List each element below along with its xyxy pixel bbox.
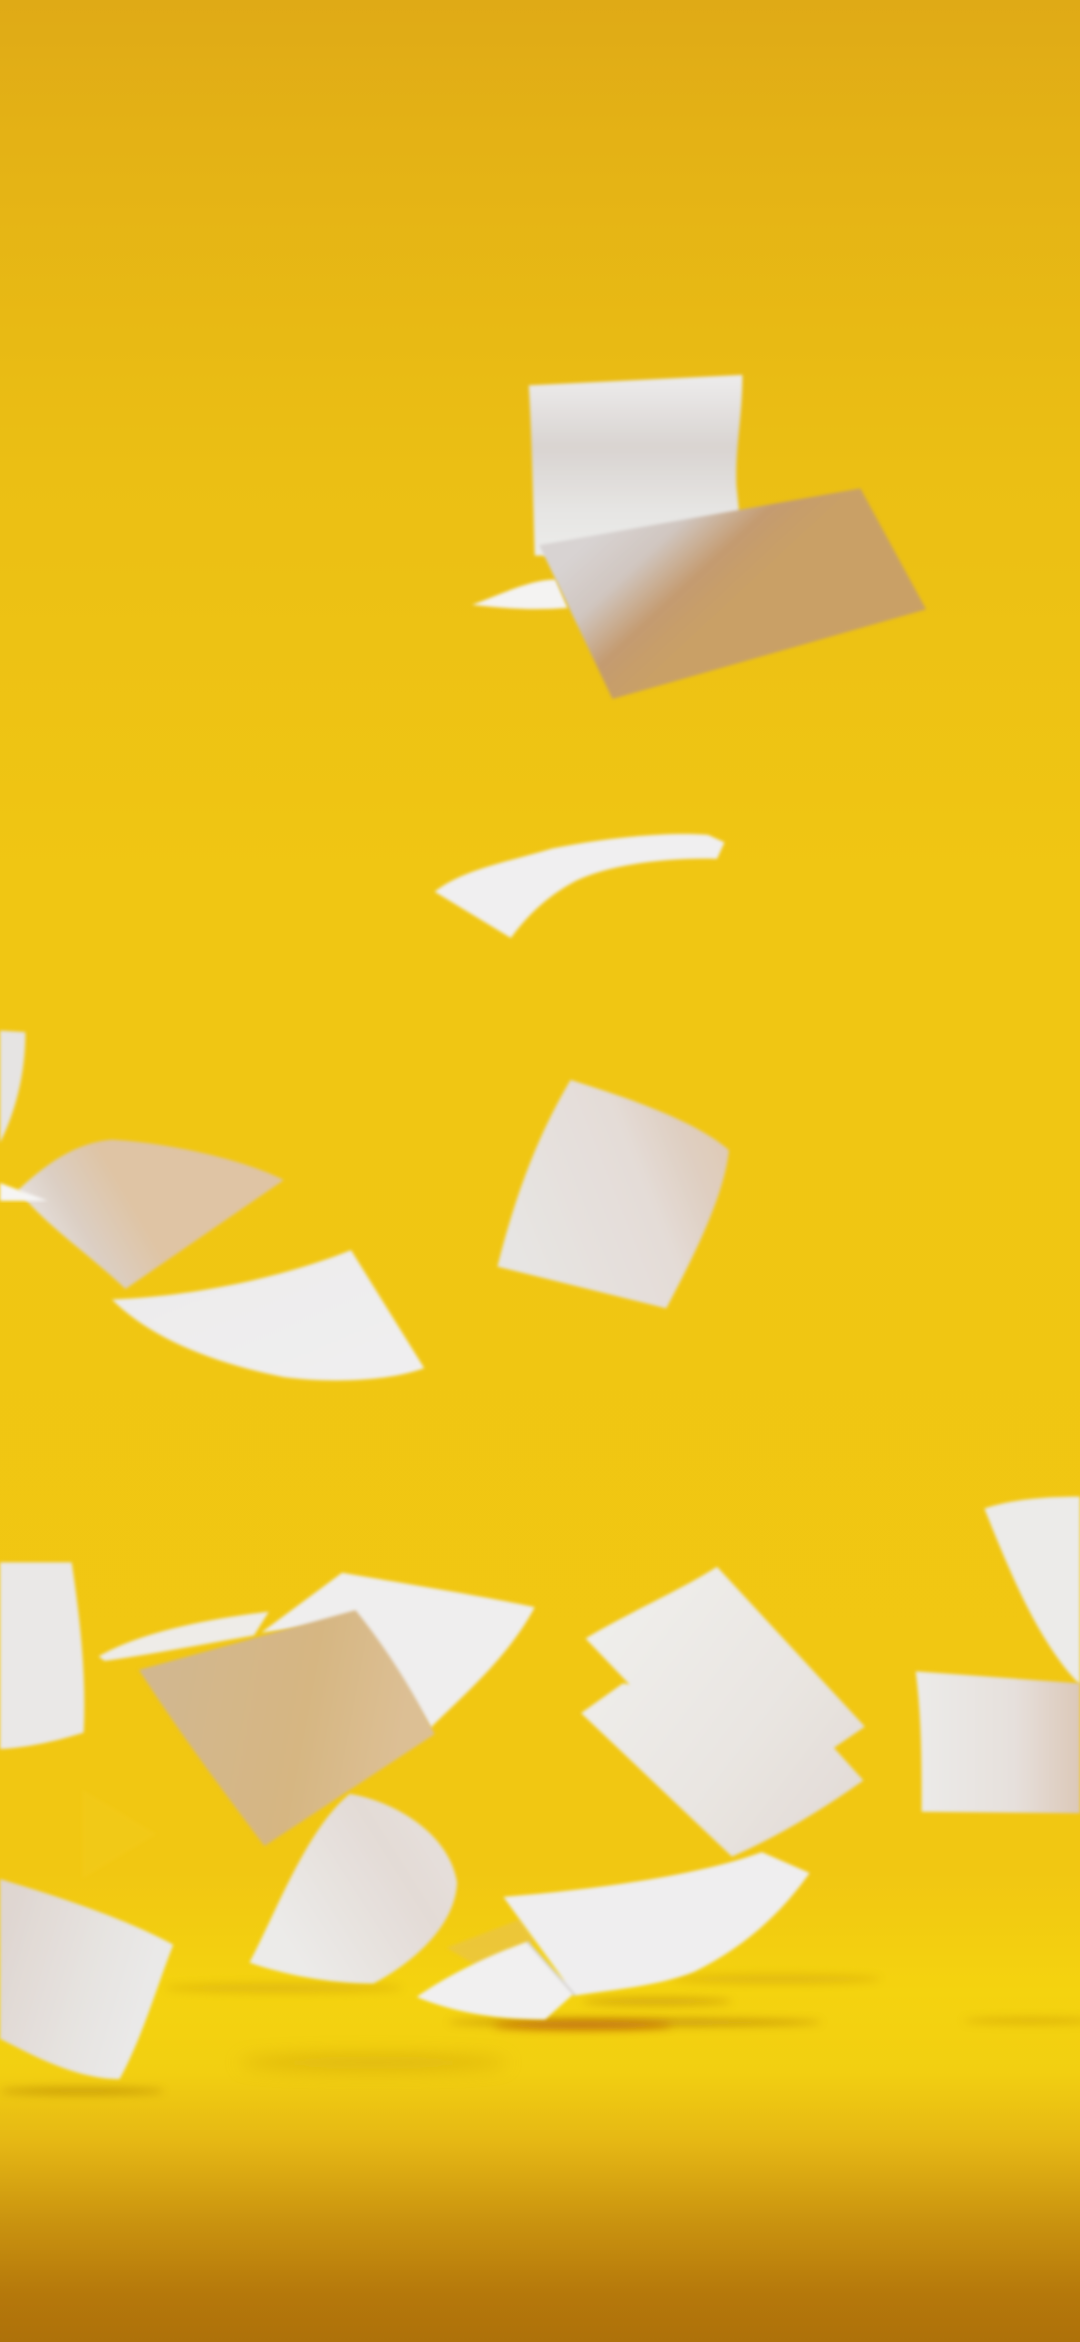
faint ghost triangle bbox=[82, 1789, 157, 1879]
paper: white curved sheet bbox=[112, 1250, 424, 1380]
paper: left tan sheet bbox=[18, 1140, 284, 1289]
paper: bottom folded sheet bbox=[417, 1852, 810, 2019]
floor shadows bbox=[0, 1975, 1080, 2094]
paper: upright folded sheet bbox=[529, 375, 742, 556]
paper: bottom left sheet bbox=[0, 1879, 173, 2079]
paper: stacked pair of sheets bbox=[581, 1567, 865, 1857]
paper: curled sheet edge-on bbox=[435, 834, 724, 938]
paper: sliver behind tan sheet bbox=[99, 1612, 269, 1661]
paper: left edge top sheet bbox=[0, 1031, 25, 1143]
paper: small sliver bbox=[472, 580, 568, 609]
paper: faint tan sheet behind bottom fold bbox=[447, 1919, 535, 1969]
paper: tan lower sheet bbox=[139, 1610, 435, 1846]
paper: right edge upper sheet bbox=[984, 1497, 1080, 1685]
paper: right edge lower sheet bbox=[916, 1671, 1080, 1813]
paper: rounded lower sheet bbox=[249, 1794, 457, 1984]
paper: white sheet behind tan sheet bbox=[261, 1573, 535, 1728]
paper: left small sliver bbox=[0, 1183, 48, 1201]
paper: centre square sheet bbox=[497, 1080, 729, 1308]
paper: left edge middle sheet bbox=[0, 1562, 84, 1749]
paper: tan shaded sheet bbox=[539, 488, 926, 699]
